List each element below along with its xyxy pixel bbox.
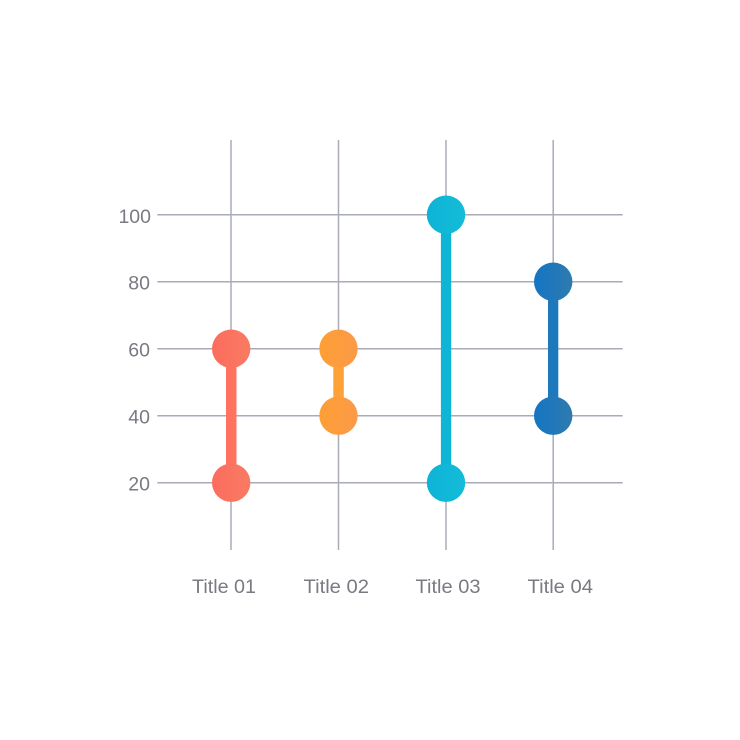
x axis labels (192, 576, 593, 598)
y axis labels: 40 (128, 406, 150, 428)
x axis labels: Title 04 (528, 576, 593, 598)
y axis labels (118, 206, 151, 496)
x axis labels: Title 02 (304, 576, 369, 598)
series: Title 03, 20 to 100 (427, 196, 465, 502)
series: Title 01, 20 to 60 (212, 330, 250, 502)
series: Title 04, 40 to 80 (534, 262, 572, 435)
y axis labels: 100 (118, 206, 151, 228)
x axis labels: Title 03 (416, 576, 480, 598)
x axis labels: Title 01 (192, 576, 256, 598)
gridlines (157, 140, 623, 550)
y axis labels: 80 (128, 272, 150, 294)
y axis labels: 20 (128, 474, 150, 496)
y axis labels: 60 (128, 340, 150, 362)
series: Title 02, 40 to 60 (319, 330, 358, 435)
